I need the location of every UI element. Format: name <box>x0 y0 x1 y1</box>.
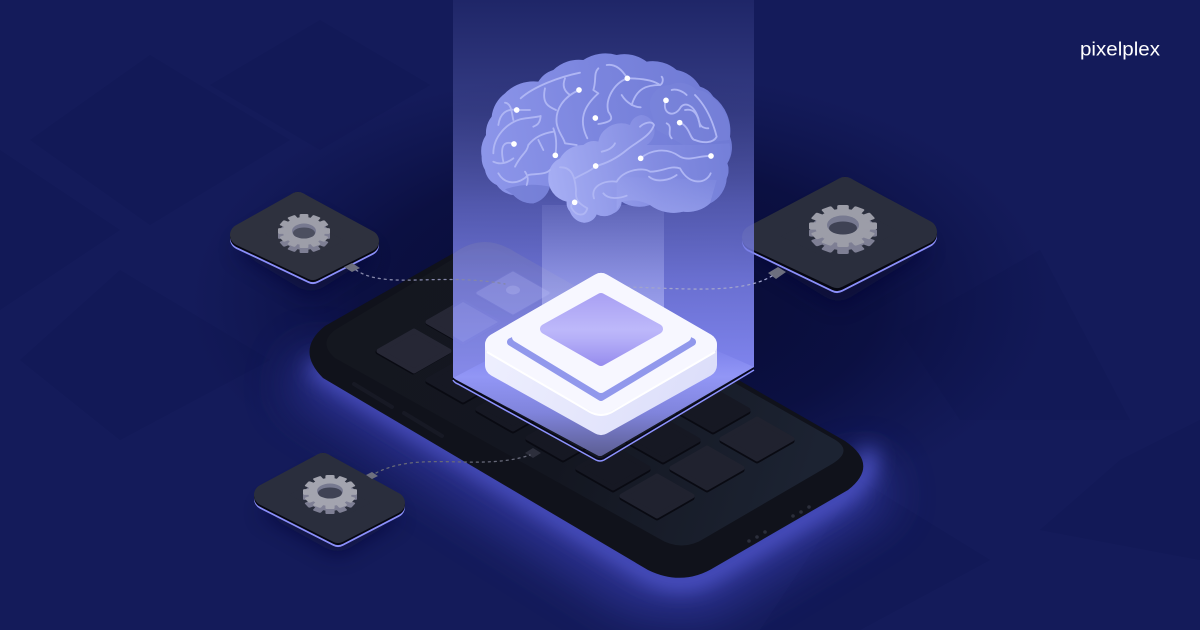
connector: left top <box>356 270 505 284</box>
gear plate: left top <box>241 203 368 273</box>
connector: left bottom <box>376 455 530 473</box>
plate edge <box>265 464 394 536</box>
plate edge <box>754 189 925 281</box>
logo: pixelplex <box>1080 40 1161 60</box>
beam bottom edge <box>453 370 754 461</box>
plate top <box>754 189 925 276</box>
connector: right <box>625 276 772 289</box>
brain upper lobes <box>481 53 732 223</box>
speaker dots <box>747 505 811 543</box>
brain temporal lobe <box>548 115 730 223</box>
chip <box>487 285 715 423</box>
beam floor <box>453 300 754 456</box>
icon: gear <box>278 214 330 253</box>
wider phone glow <box>300 370 880 590</box>
chip base top <box>497 285 705 403</box>
icon: gear <box>303 475 357 514</box>
plate top <box>265 464 394 532</box>
icon: gear <box>809 205 877 254</box>
chip edge highlight <box>487 352 715 415</box>
phone glow <box>312 365 868 581</box>
chip base side <box>497 285 705 423</box>
gear plate: right <box>754 189 925 281</box>
brain lower lobe light <box>617 177 717 213</box>
phone seen through the beam <box>453 242 600 378</box>
lit key second <box>453 302 498 342</box>
chip centre <box>545 298 658 361</box>
plate shadows <box>236 200 928 555</box>
lit key dot <box>506 286 520 294</box>
brain folds <box>493 65 717 215</box>
side buttons <box>354 384 442 436</box>
brain left lower shade <box>505 185 550 203</box>
connectors <box>356 270 772 473</box>
inner beam <box>542 205 664 335</box>
brain nodes <box>511 75 714 205</box>
phone body <box>309 242 863 578</box>
gear plate: left bottom <box>265 464 394 536</box>
phone <box>309 242 863 578</box>
brain right lobe <box>650 83 730 145</box>
plate top <box>241 203 368 269</box>
light beam panel <box>453 0 754 461</box>
ambient shadow behind the phone <box>190 70 1050 530</box>
plate edge <box>241 203 368 273</box>
app keys <box>378 273 792 518</box>
lit key <box>478 273 548 313</box>
beam body <box>453 0 754 456</box>
chip upper plate <box>517 285 686 388</box>
phone screen <box>326 248 844 546</box>
connector plugs <box>344 263 786 479</box>
chip recess <box>511 300 692 397</box>
brain <box>481 53 732 223</box>
